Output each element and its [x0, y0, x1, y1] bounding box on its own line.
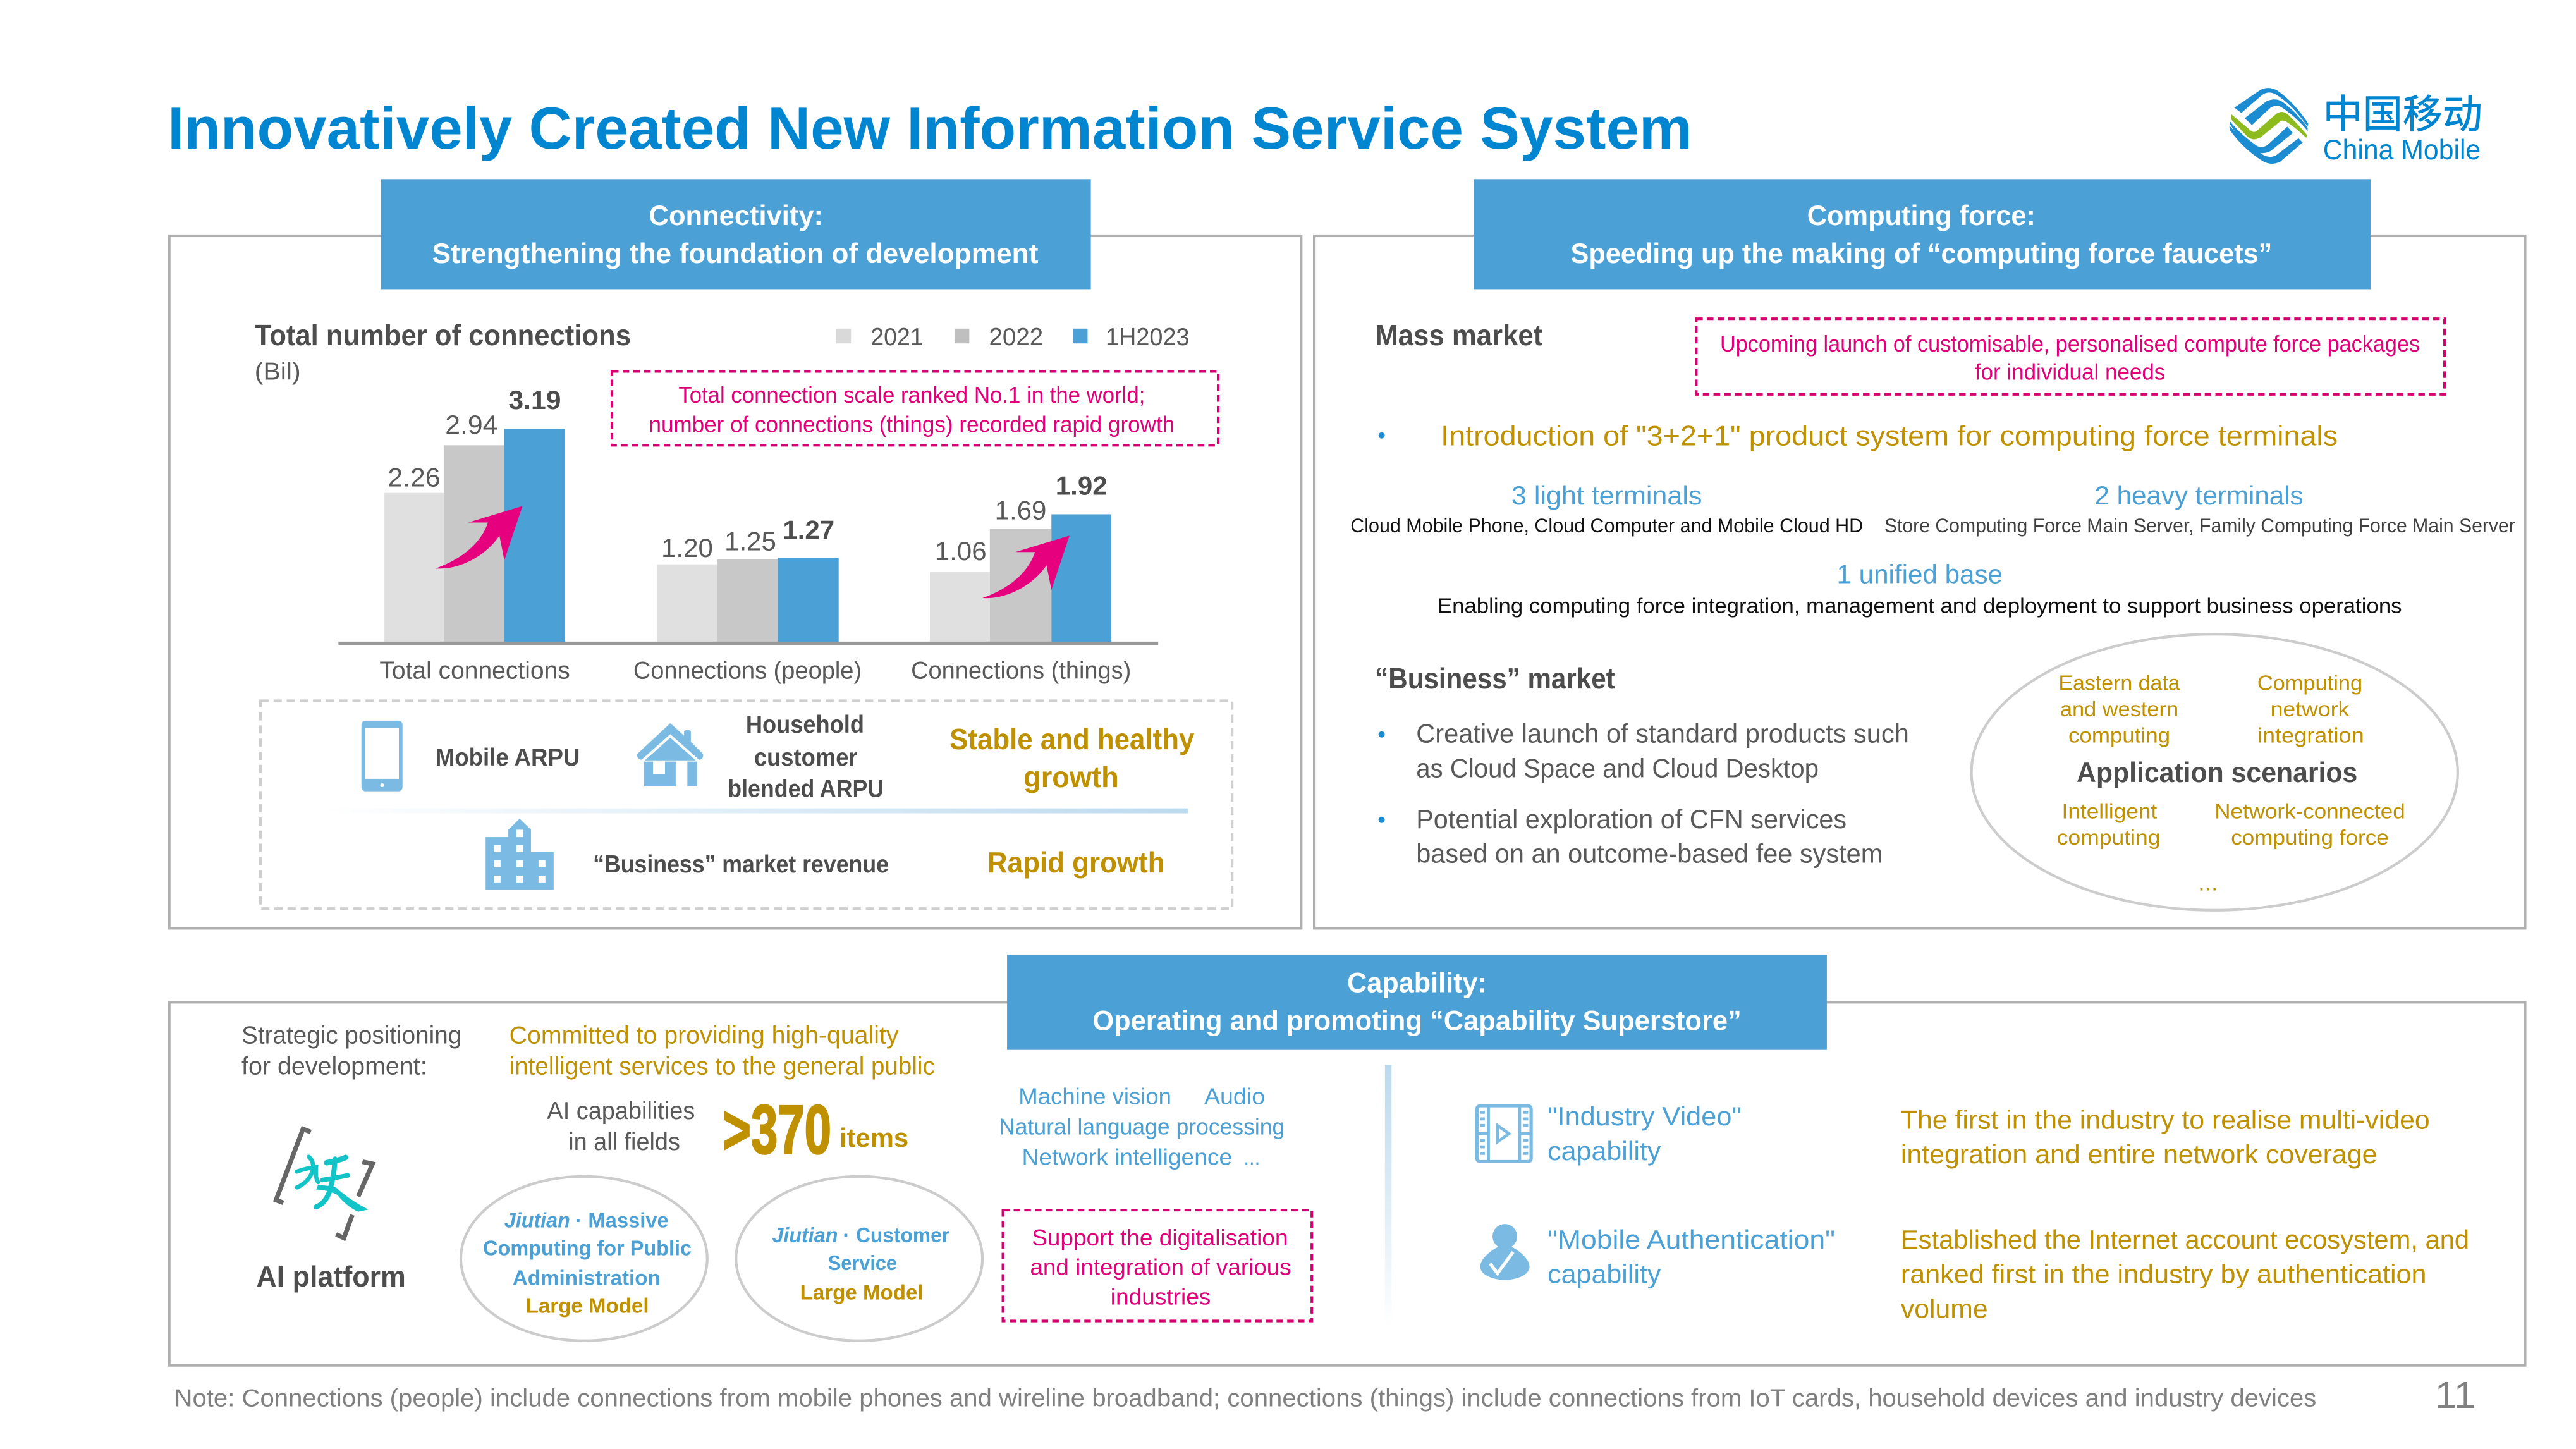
label: Mobile ARPU: Mobile ARPU [436, 744, 580, 771]
callout: digitalisation support: and integration of various [1030, 1254, 1291, 1280]
diagram: application scenarios: Application scenarios [2077, 757, 2357, 788]
chart title [255, 319, 631, 385]
chart title: Total number of connections [255, 319, 631, 352]
panel: connectivity [169, 179, 1301, 928]
text: AI capabilities: in all fields [568, 1128, 680, 1156]
callout: digitalisation support: Support the digitalisation [1032, 1225, 1288, 1250]
text: business market bullets: Creative launch of standard products such [1416, 719, 1909, 749]
text: AI fields: Machine vision [1018, 1083, 1171, 1109]
text: mobile authentication capability: capability [1547, 1259, 1661, 1289]
text: AI capabilities: AI capabilities [547, 1097, 695, 1125]
bars: connections things [930, 514, 1111, 642]
callout: digitalisation support [1003, 1210, 1312, 1321]
model: Jiutian customer service: · [843, 1223, 850, 1247]
callout: connection ranking: Total connection scale ranked No.1 in the world; [678, 382, 1145, 408]
chart title: (Bil) [255, 358, 301, 385]
callout: connection ranking: number of connections (things) recorded rapid growth [649, 412, 1175, 437]
icon: phone [362, 721, 403, 792]
text: 1 unified base: Enabling computing force integration, management and deployment to support business operations [1438, 594, 2402, 618]
label: household ARPU: blended ARPU [728, 775, 884, 802]
diagram: application scenarios: Network-connected [2214, 799, 2405, 823]
logo wordmark [2323, 83, 2482, 166]
value labels: 1.25 [724, 527, 776, 556]
icon: China Mobile mark [2230, 88, 2308, 164]
arrow: growth in connections things [982, 535, 1070, 598]
panel header: computing force [1474, 179, 2371, 289]
panel header: connectivity: Strengthening the foundation of development [432, 238, 1039, 269]
text: AI fields: Audio [1204, 1083, 1265, 1109]
diagram: application scenarios: Computing [2257, 671, 2362, 695]
category labels: Connections (things) [911, 657, 1131, 684]
label: stable and healthy growth [949, 723, 1194, 793]
value labels: 1.06 [935, 536, 987, 566]
logo: China Mobile [2230, 83, 2482, 166]
text: industry video capability: "Industry Video" [1547, 1101, 1742, 1131]
text: AI fields: Network intelligence [1022, 1144, 1232, 1170]
text: AI fields: ... [1243, 1144, 1260, 1170]
text: mobile authentication capability: "Mobile Authentication" [1547, 1225, 1835, 1254]
text: commitment [510, 1022, 935, 1080]
text: industry video capability: capability [1547, 1136, 1661, 1166]
text: industry video description: integration and entire network coverage [1901, 1139, 2378, 1169]
arrow: growth in total connections [436, 506, 522, 568]
category labels [379, 657, 1131, 684]
panel header: computing force: Computing force: [1807, 200, 2036, 231]
text: industry video description: The first in the industry to realise multi-video [1901, 1104, 2430, 1134]
label: business market revenue: “Business” market revenue [593, 851, 889, 878]
logo wordmark: China Mobile [2323, 135, 2481, 166]
callout: compute force packages: Upcoming launch of customisable, personalised compute force packages [1720, 331, 2420, 357]
text: AI fields [999, 1083, 1285, 1170]
value labels: 1.20 [661, 533, 713, 563]
text: commitment: Committed to providing high-quality [510, 1022, 899, 1049]
text: 2 heavy terminals: Store Computing Force Main Server, Family Computing Force Main Server [1884, 515, 2515, 537]
diagram: application scenarios: computing force [2231, 826, 2389, 850]
panel: capability [169, 955, 2525, 1366]
stat: more than 370 items: >370 [723, 1091, 831, 1168]
chart legend: 2022 [989, 324, 1043, 351]
model: Jiutian massive computing: · [575, 1208, 582, 1232]
value labels: 3.19 [508, 385, 561, 415]
diagram: application scenarios: Intelligent [2062, 799, 2158, 823]
text: 2 heavy terminals [1884, 480, 2515, 537]
panel: ARPU and revenue [260, 700, 1232, 908]
diagram: application scenarios: integration [2257, 724, 2364, 748]
chart legend [836, 324, 1190, 351]
panel header: computing force: Speeding up the making of “computing force faucets” [1571, 238, 2272, 269]
label: AI platform: AI platform [256, 1260, 406, 1293]
logo wordmark: 中国移动 [2323, 83, 2482, 140]
bars: connections people [657, 558, 839, 642]
icon: authenticated user [1480, 1224, 1530, 1280]
label: stable and healthy growth: Stable and healthy [949, 723, 1194, 755]
text: business market bullets: based on an outcome-based fee system [1416, 838, 1883, 868]
stat: more than 370 items: items [839, 1123, 908, 1152]
text: business market bullets: Potential exploration of CFN services [1416, 804, 1847, 834]
callout: compute force packages [1696, 319, 2445, 394]
value labels: 1.92 [1056, 470, 1108, 500]
text: 1 unified base [1438, 559, 2402, 618]
model: Jiutian massive computing [461, 1177, 707, 1341]
value labels: 2.26 [388, 462, 440, 492]
model: Jiutian customer service: Service [828, 1251, 897, 1275]
panel header: capability [1007, 955, 1827, 1050]
text: strategic positioning [241, 1022, 461, 1080]
chart legend: 1H2023 [1106, 324, 1190, 351]
model: Jiutian massive computing: Jiutian [504, 1208, 570, 1232]
text: mobile authentication description [1901, 1225, 2469, 1323]
page number: 11 [2434, 1374, 2475, 1416]
icon: AI platform logo [276, 1129, 372, 1238]
model: Jiutian customer service: Customer [856, 1223, 949, 1247]
model: Jiutian massive computing: Massive [588, 1208, 669, 1232]
model: Jiutian massive computing: Large Model [526, 1294, 649, 1318]
value labels [388, 385, 1108, 566]
model: Jiutian massive computing: Computing for Public [483, 1237, 692, 1261]
text: industry video description [1901, 1104, 2430, 1169]
category labels: Total connections [379, 657, 570, 684]
text: business market bullets: as Cloud Space and Cloud Desktop [1416, 753, 1819, 783]
icon: video [1477, 1106, 1531, 1161]
heading: business market: “Business” market [1375, 662, 1615, 695]
label: household ARPU: customer [754, 744, 858, 771]
chart legend: 2021 [870, 324, 924, 351]
value labels: 1.27 [783, 515, 834, 544]
text: strategic positioning: for development: [241, 1053, 427, 1080]
model: Jiutian customer service: Jiutian [772, 1223, 838, 1247]
text: AI fields: Natural language processing [999, 1114, 1285, 1140]
callout: digitalisation support: industries [1111, 1284, 1211, 1310]
label: stable and healthy growth: growth [1023, 761, 1119, 793]
value labels: 2.94 [445, 410, 497, 439]
heading: mass market: Mass market [1375, 319, 1542, 352]
text: mobile authentication description: ranked first in the industry by authentication [1901, 1259, 2427, 1289]
callout: connection ranking [612, 371, 1218, 445]
diagram: application scenarios: computing [2057, 826, 2160, 850]
text: 2 heavy terminals: 2 heavy terminals [2095, 480, 2304, 510]
text: business market bullets [1379, 719, 1909, 868]
text: mobile authentication capability [1547, 1225, 1835, 1289]
value labels: 1.69 [995, 495, 1046, 525]
callout: compute force packages: for individual needs [1975, 358, 2165, 384]
bars: total connections [384, 429, 565, 642]
diagram: application scenarios: network [2271, 697, 2349, 721]
text: mobile authentication description: Established the Internet account ecosystem, and [1901, 1225, 2469, 1254]
text: commitment: intelligent services to the general public [510, 1053, 935, 1080]
footnote: Note: Connections (people) include connections from mobile phones and wireline broadband; connections (things) include connections from IoT cards, household devices and industry devices [174, 1385, 2316, 1412]
text: strategic positioning: Strategic positioning [241, 1022, 461, 1049]
diagram: application scenarios: Eastern data [2058, 671, 2180, 695]
label: household ARPU: Household [746, 711, 864, 738]
panel header: connectivity [381, 179, 1091, 289]
diagram: application scenarios [1972, 634, 2458, 910]
model: Jiutian massive computing: Administration [513, 1266, 661, 1290]
text: 3 light terminals [1350, 480, 1863, 537]
model: Jiutian customer service: Large Model [800, 1281, 924, 1305]
icon: house [637, 723, 703, 786]
panel header: capability: Operating and promoting “Capability Superstore” [1092, 1006, 1742, 1037]
category labels: Connections (people) [633, 657, 862, 684]
diagram: application scenarios: ... [2198, 872, 2218, 896]
text: 3 light terminals: 3 light terminals [1511, 480, 1702, 510]
text: industry video capability [1547, 1101, 1742, 1166]
label: rapid growth: Rapid growth [987, 846, 1165, 879]
panel header: connectivity: Connectivity: [649, 200, 823, 231]
panel: computing force [1314, 179, 2525, 928]
bar chart: total number of connections [338, 385, 1158, 684]
title: Innovatively Created New Information Service System [168, 95, 1692, 161]
label: household ARPU [728, 711, 884, 802]
text: 3+2+1 product system: Introduction of "3+2+1" product system for computing force terminals [1441, 420, 2338, 451]
diagram: application scenarios: and western [2060, 697, 2178, 721]
panel header: capability: Capability: [1347, 968, 1487, 999]
text: 3 light terminals: Cloud Mobile Phone, Cloud Computer and Mobile Cloud HD [1350, 515, 1863, 537]
model: Jiutian customer service [736, 1177, 982, 1341]
text: mobile authentication description: volume [1901, 1293, 1988, 1323]
text: AI capabilities [547, 1097, 695, 1156]
diagram: application scenarios: computing [2068, 724, 2170, 748]
text: 1 unified base: 1 unified base [1837, 559, 2003, 589]
icon: building [485, 819, 554, 890]
